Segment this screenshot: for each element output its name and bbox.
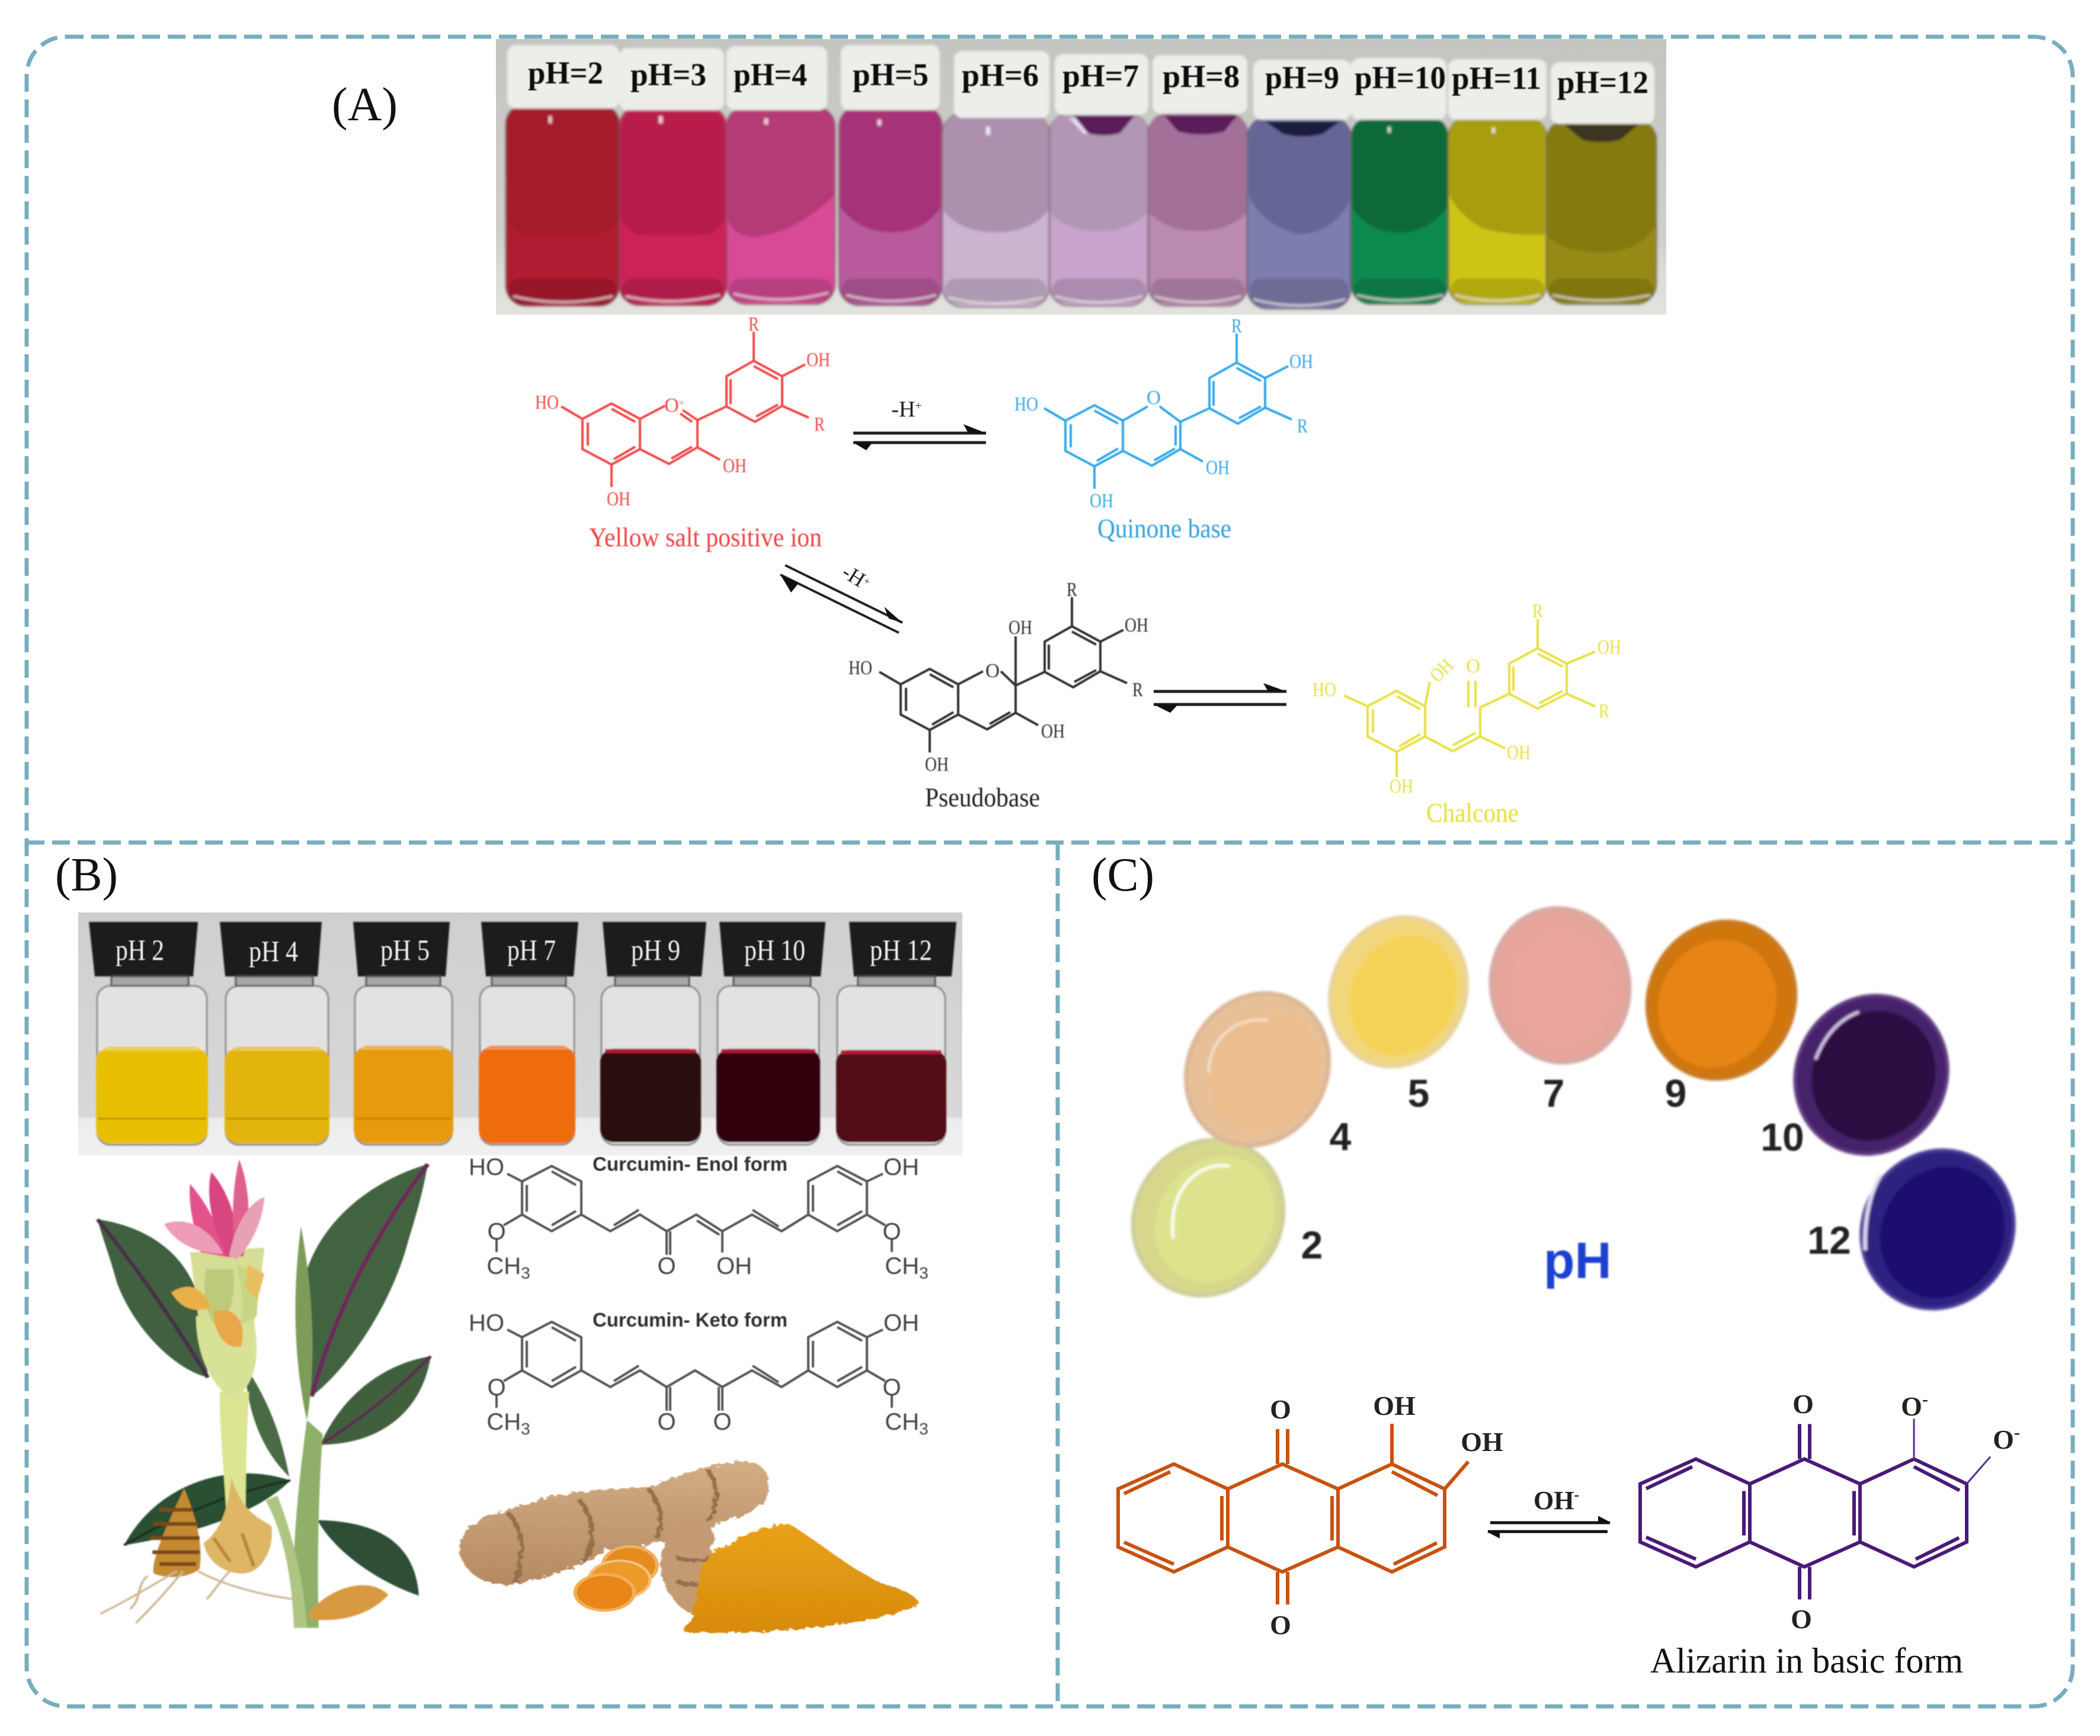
- pH value labels for dishes: 12: [1807, 1218, 1851, 1262]
- pH labels on white caps: pH=8: [1163, 59, 1240, 94]
- structure: alizarin in basic form (purple): [1640, 1389, 2020, 1634]
- structure: yellow salt positive ion (red): O: [664, 395, 679, 417]
- caption: yellow salt positive ion: Yellow salt positive ion: [589, 522, 822, 552]
- structure: yellow salt positive ion (red): OH: [723, 455, 747, 477]
- illustration: turmeric rhizome and powder: [460, 1462, 919, 1632]
- structure: curcumin enol form: OH: [716, 1253, 752, 1279]
- structure: alizarin in basic form (purple): -: [2014, 1423, 2020, 1442]
- structure: pseudobase (black): HO: [849, 657, 872, 679]
- structure: chalcone (yellow): OH: [1507, 742, 1531, 764]
- photo: anthocyanin vials pH 2 to 12: [496, 39, 1666, 315]
- structure: alizarin in basic form (purple): O: [1993, 1424, 2014, 1455]
- photo: curcumin vials: [78, 912, 962, 1155]
- heading: pH: pH: [1544, 1232, 1612, 1289]
- structure: alizarin in basic form (purple): O: [1791, 1604, 1812, 1634]
- structure: curcumin keto form: [469, 1309, 929, 1438]
- structure: curcumin enol form: O: [882, 1219, 901, 1245]
- pH labels on white caps: pH=4: [734, 57, 807, 92]
- pH value labels for dishes: 10: [1760, 1115, 1804, 1159]
- structure: yellow salt positive ion (red): OH: [806, 349, 830, 371]
- structure: curcumin enol form: 3: [521, 1264, 530, 1282]
- arrow: diagonal equilibrium to pseudobase: [780, 560, 902, 633]
- dish: pH 2: [1103, 1110, 1313, 1325]
- structure: curcumin enol form: O: [657, 1253, 676, 1279]
- structure: chalcone (yellow): O: [1466, 655, 1480, 677]
- structure: curcumin keto form: 3: [521, 1420, 530, 1438]
- structure: yellow salt positive ion (red): [535, 313, 830, 510]
- structure: quinone base (blue): R: [1231, 315, 1242, 337]
- structure: alizarin (orange): OH: [1461, 1427, 1503, 1457]
- dish: pH 7: [1479, 898, 1641, 1073]
- structure: chalcone (yellow): OH: [1426, 655, 1458, 687]
- structure: chalcone (yellow): OH: [1390, 776, 1413, 797]
- structure: yellow salt positive ion (red): HO: [535, 392, 559, 414]
- structure: quinone base (blue): [1014, 315, 1313, 512]
- structure: alizarin in basic form (purple): O: [1792, 1389, 1814, 1419]
- pH labels on white caps: pH=3: [630, 57, 706, 92]
- arrow: diagonal equilibrium to pseudobase: -H: [838, 560, 869, 592]
- pH value labels for dishes: 4: [1330, 1114, 1352, 1158]
- pH labels on black caps: pH 7: [507, 933, 556, 966]
- structure: curcumin keto form: O: [713, 1409, 732, 1435]
- pH labels on black caps: [116, 933, 932, 968]
- structure: chalcone (yellow): R: [1532, 600, 1543, 622]
- pH labels on white caps: pH=2: [528, 55, 603, 91]
- caption: quinone base: Quinone base: [1097, 513, 1231, 543]
- structure: chalcone (yellow): HO: [1312, 679, 1336, 701]
- structure: alizarin (orange): O: [1270, 1394, 1291, 1424]
- caption: alizarin in basic form: Alizarin in basic form: [1650, 1641, 1963, 1680]
- structure: pseudobase (black): R: [1067, 579, 1077, 601]
- structure: alizarin (orange): O: [1270, 1610, 1291, 1640]
- structure: curcumin enol form: [469, 1153, 929, 1282]
- structure: curcumin enol form: O: [487, 1219, 506, 1245]
- caption: chalcone: Chalcone: [1426, 797, 1519, 828]
- structure: pseudobase (black): O: [985, 660, 1000, 682]
- structure: curcumin keto form: CH: [486, 1409, 521, 1435]
- structure: pseudobase (black): OH: [925, 754, 949, 776]
- structure: curcumin keto form: O: [882, 1375, 901, 1401]
- dish: pH 12: [1833, 1122, 2043, 1337]
- structure: pseudobase (black): [849, 579, 1148, 776]
- structure: chalcone (yellow): OH: [1598, 636, 1621, 658]
- structure: yellow salt positive ion (red): OH: [607, 488, 630, 510]
- arrow: equilibrium to chalcone: [1154, 683, 1286, 713]
- structure: pseudobase (black): OH: [1009, 617, 1032, 639]
- pH value labels for dishes: 2: [1301, 1223, 1323, 1267]
- structure: curcumin enol form: CH: [885, 1253, 919, 1279]
- structure: curcumin keto form: OH: [883, 1310, 919, 1336]
- structure: pseudobase (black): OH: [1125, 614, 1148, 636]
- heading: panel C label: (C): [1091, 849, 1154, 901]
- arrow: equilibrium to quinone base: [853, 397, 986, 450]
- pH labels on white caps: pH=11: [1452, 60, 1541, 96]
- structure: pseudobase (black): OH: [1041, 720, 1065, 742]
- structure: yellow salt positive ion (red): R: [748, 313, 759, 335]
- structure: quinone base (blue): R: [1297, 415, 1308, 437]
- pH labels on white caps: pH=5: [853, 57, 929, 92]
- structure: pseudobase (black): R: [1132, 679, 1143, 701]
- heading: panel B label: (B): [55, 849, 118, 901]
- structure: yellow salt positive ion (red): R: [814, 414, 825, 435]
- structure: quinone base (blue): HO: [1014, 393, 1038, 415]
- pH labels on white caps: [528, 55, 1648, 100]
- structure: yellow salt positive ion (red): +: [679, 398, 684, 408]
- pH value labels for dishes: 9: [1665, 1071, 1686, 1115]
- dish: pH 9: [1622, 898, 1820, 1103]
- structure: alizarin (orange): [1118, 1391, 1503, 1640]
- heading: panel A label: (A): [332, 79, 398, 131]
- pH labels on black caps: pH 10: [744, 933, 805, 966]
- structure: curcumin enol form: OH: [883, 1154, 919, 1180]
- structure: chalcone (yellow): R: [1599, 700, 1609, 722]
- pH labels on white caps: pH=12: [1557, 65, 1648, 100]
- pH labels on white caps: pH=10: [1355, 60, 1446, 95]
- pH value labels for dishes: 5: [1408, 1071, 1429, 1115]
- structure: curcumin enol form: 3: [919, 1264, 929, 1282]
- structure: curcumin keto form: HO: [469, 1310, 504, 1336]
- pH labels on white caps: pH=6: [962, 57, 1039, 93]
- arrow: equilibrium to quinone base: +: [915, 399, 922, 412]
- pH labels on black caps: pH 2: [116, 933, 164, 966]
- pH value labels for dishes: 7: [1543, 1071, 1564, 1115]
- structure: alizarin in basic form (purple): -: [1922, 1389, 1928, 1409]
- arrow: alizarin equilibrium with OH-: -: [1574, 1486, 1579, 1503]
- dish: pH 4: [1159, 968, 1356, 1171]
- pH labels on white caps: pH=9: [1265, 60, 1339, 95]
- pH value labels for dishes: [1301, 1071, 1851, 1267]
- photo: alizarin pH dishes: [1103, 895, 2043, 1337]
- dish: pH 5: [1306, 895, 1491, 1088]
- arrow: diagonal equilibrium to pseudobase: +: [862, 575, 873, 588]
- structure: curcumin keto form: 3: [919, 1420, 929, 1438]
- structure: curcumin enol form: CH: [486, 1253, 521, 1279]
- structure: curcumin keto form: O: [657, 1409, 676, 1435]
- title: curcumin keto form: Curcumin- Keto form: [593, 1309, 787, 1331]
- pH labels on black caps: pH 12: [870, 933, 932, 966]
- structure: curcumin keto form: CH: [885, 1409, 919, 1435]
- pH labels on black caps: pH 9: [631, 933, 680, 966]
- arrow: alizarin equilibrium with OH-: [1488, 1486, 1610, 1538]
- arrow: equilibrium to quinone base: -H: [891, 397, 915, 422]
- illustration: turmeric plant: [98, 1160, 431, 1628]
- structure: quinone base (blue): OH: [1206, 457, 1230, 479]
- structure: alizarin (orange): OH: [1373, 1391, 1416, 1421]
- pH labels on black caps: pH 4: [249, 934, 298, 968]
- dish: pH 10: [1766, 968, 1976, 1182]
- pH labels on white caps: pH=7: [1062, 58, 1139, 94]
- caption: pseudobase: Pseudobase: [925, 782, 1040, 812]
- structure: alizarin in basic form (purple): O: [1901, 1391, 1922, 1421]
- structure: curcumin keto form: O: [487, 1375, 506, 1401]
- pH labels on black caps: pH 5: [380, 933, 430, 966]
- structure: chalcone (yellow): [1312, 600, 1621, 797]
- structure: quinone base (blue): OH: [1090, 490, 1113, 512]
- structure: quinone base (blue): OH: [1289, 351, 1313, 373]
- title: curcumin enol form: Curcumin- Enol form: [593, 1153, 787, 1175]
- arrow: alizarin equilibrium with OH-: OH: [1534, 1486, 1574, 1515]
- structure: curcumin enol form: HO: [469, 1154, 504, 1180]
- structure: quinone base (blue): O: [1147, 387, 1161, 409]
